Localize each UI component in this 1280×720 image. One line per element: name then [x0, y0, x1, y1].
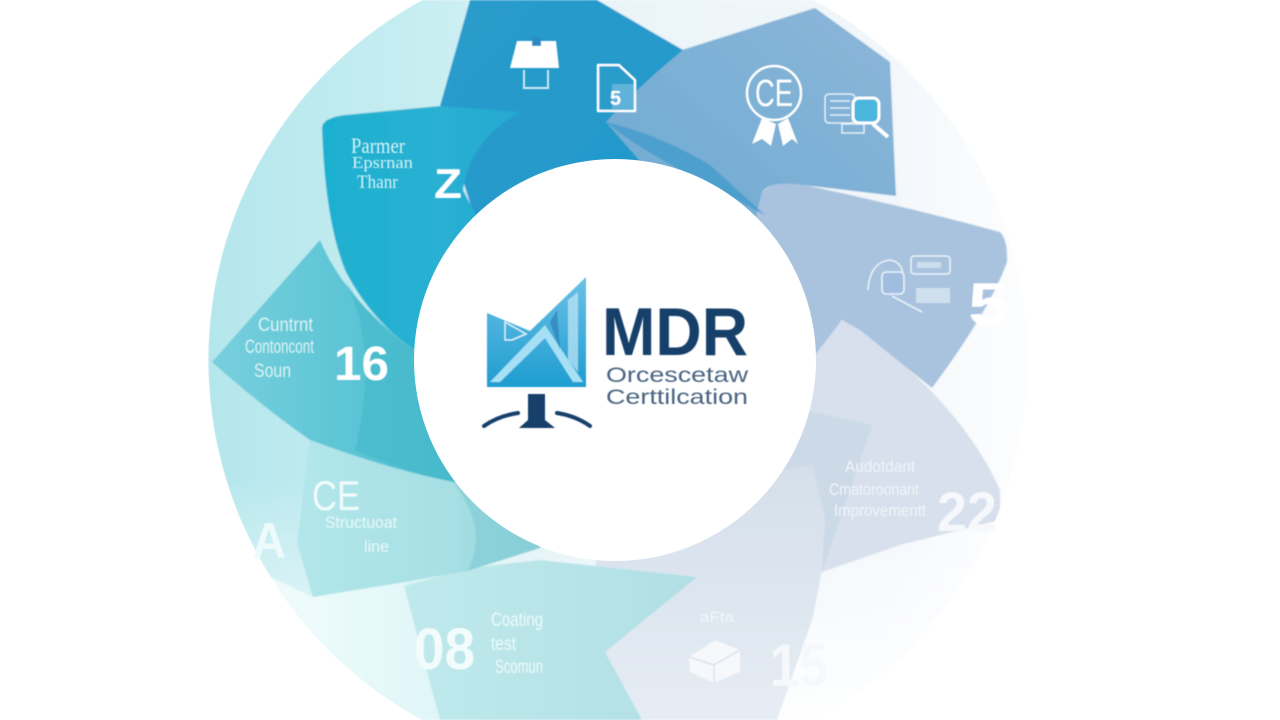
text: top-left cyan label: [351, 133, 414, 193]
icon: CE medal: [747, 66, 801, 146]
icon: document number 5: 5: [610, 88, 621, 110]
panel: outer ring and segments: [200, 0, 1040, 720]
icon: monitor: [484, 277, 590, 428]
number: 08: 08: [414, 617, 475, 682]
segment labels: [245, 37, 1010, 699]
text: bottom label: test: [491, 634, 517, 655]
icon: document with magnifier: [825, 94, 888, 137]
segment: lower-right grey blue: [810, 320, 1000, 572]
segment: bottom-right lavender: [590, 465, 825, 720]
MDR certification circular infographic: [208, 0, 1008, 720]
icon: clipboard stand: [510, 37, 559, 88]
icon: box: [689, 640, 740, 683]
icon: CE mark lower-left: CE: [312, 472, 360, 519]
text: top-left cyan label: Parmer: [351, 133, 406, 158]
segment: teal left: [212, 240, 456, 483]
text: lower-left label: line: [364, 537, 389, 556]
icon: document number 5: [598, 65, 635, 111]
text: lower-right label: [829, 457, 926, 520]
segment: top blue: [439, 0, 684, 216]
text: subtitle: Orcescetaw: [606, 364, 749, 387]
text: top-left cyan label: Thanr: [357, 172, 399, 193]
number: Z: Z: [434, 160, 462, 207]
segment: cyan: [322, 106, 520, 360]
number: 5: 5: [968, 271, 1010, 338]
text: small label above box: aFta: [700, 609, 735, 626]
text: bottom label: Scomun: [495, 657, 543, 678]
segment: lower-left teal: [297, 440, 560, 597]
text: lower-right label: Cmatoroonant: [829, 480, 919, 499]
segment: top-right blue: [605, 8, 897, 217]
icon: right analysis icons: [868, 256, 950, 312]
segment: bottom teal: [404, 560, 697, 720]
MDR logo: [484, 277, 749, 428]
text: left teal label: Contoncont: [245, 337, 315, 358]
number: 16: 16: [334, 338, 389, 391]
heading: MDR: MDR: [602, 294, 748, 370]
text: bottom label: Coating: [491, 610, 543, 631]
center circle: [414, 159, 816, 561]
text: subtitle: Certtilcation: [606, 386, 748, 409]
text: top-left cyan label: Epsrnan: [352, 153, 414, 172]
text: left teal label: Soun: [254, 361, 291, 382]
text: left teal label: Cuntrnt: [258, 315, 314, 336]
text: left teal label: [245, 315, 315, 382]
text: lower-left label: [325, 513, 397, 556]
text: lower-left label: Structuoat: [325, 513, 397, 532]
number: 4: A: [252, 513, 286, 569]
segment: lower-left pale wedge: [272, 578, 440, 720]
text: bottom label: [491, 610, 543, 678]
text: subtitle: [606, 364, 749, 409]
number: 22: 22: [937, 480, 997, 543]
text: lower-right label: Audotdant: [845, 457, 915, 476]
text: lower-right label: Improvementt: [834, 501, 926, 520]
number: 15: 15: [770, 632, 828, 699]
segment: right blue: [755, 182, 1008, 388]
icon: CE medal: CE: [755, 73, 793, 115]
